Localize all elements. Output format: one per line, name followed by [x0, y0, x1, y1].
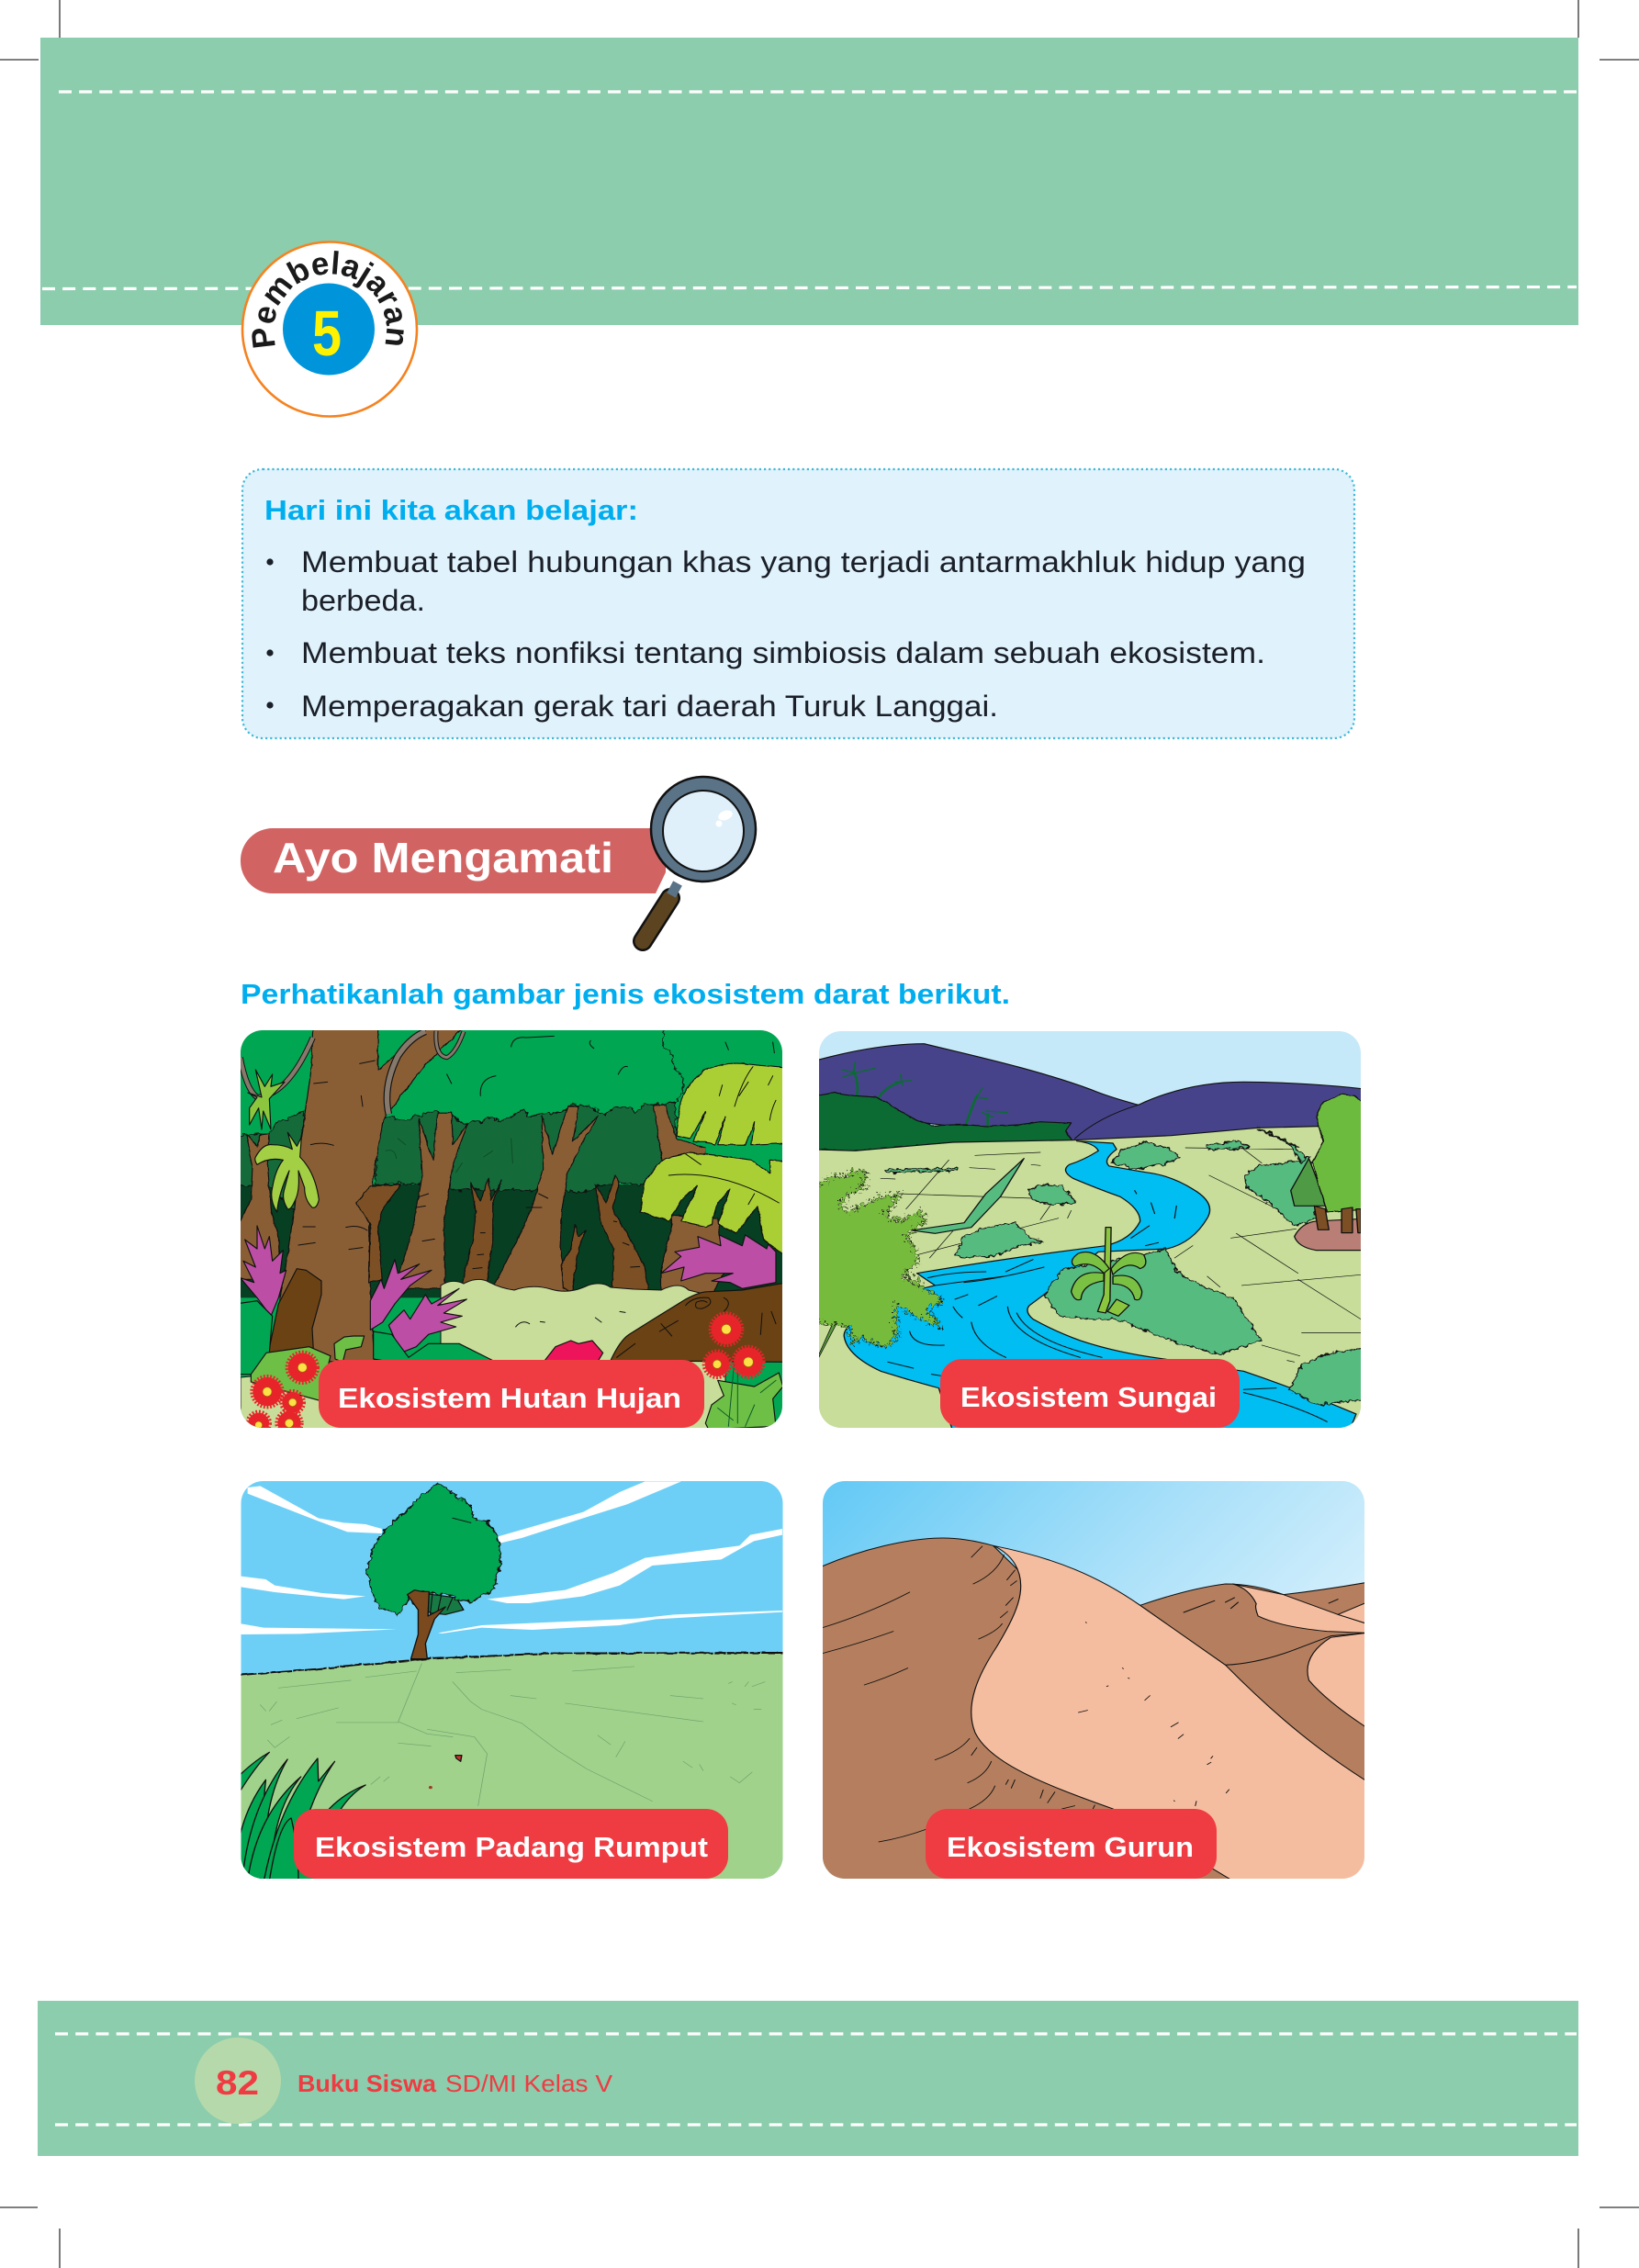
main dark dune [819, 1538, 1233, 1881]
illustration: river [808, 1031, 1375, 1432]
left small tree [232, 1134, 280, 1279]
red flowers right [705, 1314, 763, 1376]
clouds [241, 1481, 782, 1634]
bottom bushes [236, 1301, 273, 1375]
objective 2: Membuat teks nonfiksi tentang simbiosis dalam sebuah ekosistem. [301, 636, 1265, 669]
panel: river ecosystem [808, 1031, 1375, 1432]
left tree [819, 1321, 837, 1357]
tree 3 [461, 1178, 502, 1292]
icon: magnifying glass [643, 777, 756, 941]
learning objectives box [242, 469, 1354, 738]
label: desert [926, 1809, 1217, 1879]
pink leaf [544, 1341, 603, 1361]
label: desert: Ekosistem Gurun [947, 1831, 1194, 1863]
label: rainforest [319, 1360, 704, 1428]
page number badge: 82 [216, 2064, 259, 2102]
page number badge [195, 2038, 281, 2124]
field lines [881, 1148, 1361, 1362]
objective 1: berbeda. [301, 584, 425, 617]
dune ripples [823, 1546, 1095, 1842]
stump [268, 1269, 321, 1356]
big trunk [268, 1022, 468, 1362]
bushes [886, 1128, 1375, 1405]
objective 1: Membuat tabel hubungan khas yang terjadi antarmakhluk hidup yang [301, 545, 1306, 578]
badge arc text: Pembelajaran [252, 251, 404, 348]
tree [410, 1591, 464, 1614]
grass blades [235, 1752, 365, 1881]
label: grassland [294, 1809, 728, 1879]
footer text: SD/MI Kelas V [445, 2070, 613, 2097]
label: river: Ekosistem Sungai [960, 1381, 1217, 1413]
purple plants [241, 1226, 286, 1316]
tree stump branch [356, 1185, 401, 1283]
right tree [1294, 1218, 1361, 1251]
hanging plants [248, 1070, 285, 1129]
hills [808, 1044, 1375, 1141]
objective 1 [266, 545, 1306, 617]
panel: grassland ecosystem [235, 1481, 791, 1881]
leaves [705, 1147, 707, 1153]
instruction text: Perhatikanlah gambar jenis ekosistem darat berikut. [241, 978, 1010, 1010]
tree 6 [595, 1175, 649, 1295]
label: rainforest: Ekosistem Hutan Hujan [338, 1382, 681, 1414]
palms [853, 1072, 988, 1127]
log [611, 1283, 788, 1362]
dark green hillside [808, 1093, 1073, 1151]
back dunes [1135, 1582, 1367, 1797]
horizon line [235, 1653, 791, 1676]
river [844, 1141, 1356, 1432]
forest floor [241, 1279, 725, 1442]
panel: desert ecosystem [819, 1481, 1367, 1881]
lesson badge [241, 241, 419, 418]
lesson number: 5 [312, 298, 342, 369]
label: river [940, 1359, 1240, 1428]
tree 5 [562, 1224, 586, 1292]
top header band [40, 38, 1578, 325]
ground [808, 1125, 1375, 1432]
footer text [297, 2070, 613, 2097]
objective 3: Memperagakan gerak tari daerah Turuk Langgai. [301, 690, 998, 723]
label: grassland: Ekosistem Padang Rumput [315, 1831, 708, 1863]
footer band [38, 2001, 1578, 2156]
ground [239, 1653, 787, 1881]
illustration: desert dunes [819, 1481, 1367, 1881]
banana plant [1097, 1228, 1111, 1313]
illustration: rainforest [232, 1022, 788, 1442]
section heading: Ayo Mengamati: Ayo Mengamati [273, 834, 613, 881]
objectives heading: Hari ini kita akan belajar: [264, 494, 638, 526]
vines [387, 1031, 425, 1114]
main light dune [971, 1545, 1367, 1881]
panel: rainforest ecosystem [232, 1022, 788, 1442]
section heading: Ayo Mengamati [241, 828, 666, 893]
illustration: grassland [235, 1481, 791, 1881]
tree 4 [491, 1106, 599, 1292]
leaves bottom right [705, 1373, 783, 1430]
purple plant right [661, 1235, 776, 1288]
footer text: Buku Siswa [297, 2070, 437, 2097]
tree 7 behind leaves [654, 1105, 724, 1295]
tree 2 [395, 1113, 468, 1288]
red flowers [248, 1353, 317, 1435]
